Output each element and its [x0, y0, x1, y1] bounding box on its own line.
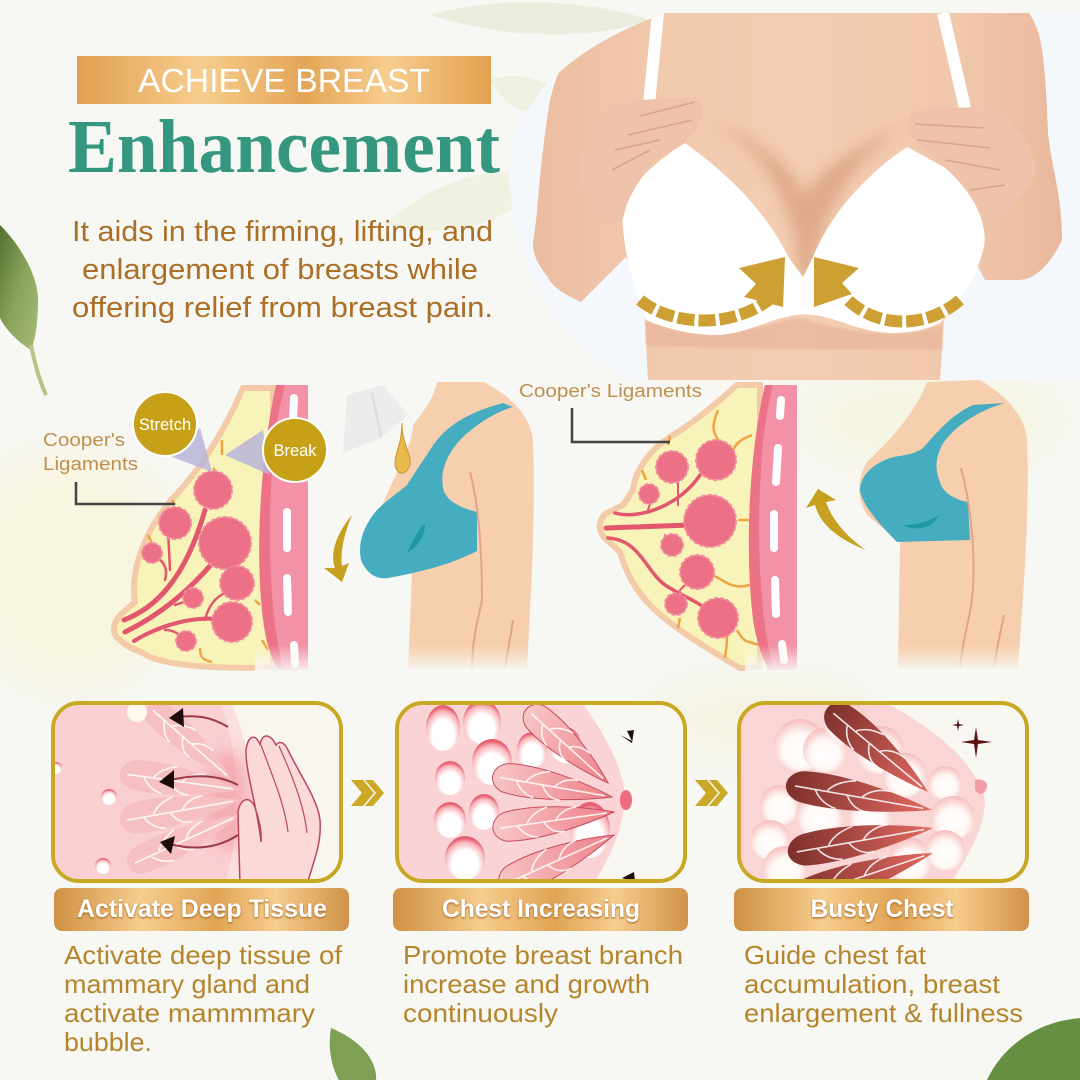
icon: chevrons two	[695, 780, 728, 806]
diagram: after anatomy	[600, 385, 797, 670]
massage arrows	[166, 716, 238, 848]
caption button: chest increasing: Chest Increasing	[442, 895, 640, 923]
panel: busty chest	[737, 701, 1029, 883]
caption button: busty chest: Busty Chest	[810, 895, 954, 923]
ligaments	[642, 410, 758, 658]
title: Enhancement	[68, 105, 500, 189]
intro text: It aids in the firming, lifting, and	[72, 216, 493, 248]
bra	[622, 143, 985, 335]
leaf: bottom centre	[330, 1028, 376, 1080]
caption button: busty chest	[734, 888, 1029, 931]
intro text: offering relief from breast pain.	[72, 292, 493, 324]
ducts	[124, 510, 205, 620]
text: activate deep tissue description: activate mammmary	[64, 998, 315, 1028]
text: chest increasing description: continuously	[403, 998, 558, 1028]
text: activate deep tissue description: bubble.	[64, 1027, 152, 1057]
under-band shading	[646, 318, 942, 350]
hand left	[622, 97, 702, 221]
leaf: left edge	[0, 225, 46, 395]
arrow: sagging down	[324, 515, 352, 582]
ligaments	[148, 440, 268, 662]
chest wall	[749, 385, 797, 670]
soft cleavage shading	[731, 129, 889, 276]
title banner: ACHIEVE BREAST	[138, 62, 430, 99]
intro text	[72, 216, 493, 324]
gold arrows	[739, 257, 785, 307]
callout: Stretch: Stretch	[139, 416, 191, 434]
arrow: lifting up	[806, 489, 866, 550]
icon: chevrons one	[351, 780, 384, 806]
figure: sagging profile	[360, 382, 534, 668]
callout: Break	[225, 418, 327, 482]
icon: cotton pad with oil drop	[343, 385, 410, 473]
straps	[649, 13, 658, 104]
hand right	[944, 108, 1035, 204]
text: activate deep tissue description	[64, 940, 343, 1057]
title banner	[77, 56, 491, 104]
text: busty chest description: enlargement & fullness	[744, 998, 1023, 1028]
text: chest increasing description: increase and growth	[403, 969, 650, 999]
gold compression arc	[640, 299, 770, 321]
caption button: chest increasing	[393, 888, 688, 931]
torso	[533, 13, 1062, 380]
text: busty chest description	[744, 940, 1023, 1028]
text: activate deep tissue description: Activate deep tissue of	[64, 940, 343, 970]
label: Cooper's Ligaments right: Cooper's Ligaments	[519, 381, 702, 401]
text: activate deep tissue description: mammary gland and	[64, 969, 310, 999]
label: Cooper's Ligaments left: Cooper's	[43, 430, 125, 450]
lobules	[194, 471, 232, 509]
callout: Stretch	[133, 392, 212, 472]
text: busty chest description: accumulation, breast	[744, 969, 1001, 999]
diagram: before anatomy	[114, 385, 308, 670]
text: chest increasing description	[403, 940, 683, 1028]
label: Cooper's Ligaments left: Ligaments	[43, 454, 138, 474]
chest wall	[259, 385, 308, 670]
leaf: bottom right	[986, 1018, 1080, 1080]
text: chest increasing description: Promote breast branch	[403, 940, 683, 970]
panel: activate deep tissue	[50, 695, 341, 885]
callout: Break: Break	[273, 442, 317, 460]
panel: chest increasing	[395, 697, 685, 901]
hand	[238, 736, 320, 885]
caption button: activate deep tissue: Activate Deep Tissue	[77, 895, 327, 923]
lobules	[656, 451, 688, 483]
text: busty chest description: Guide chest fat	[744, 940, 927, 970]
ducts	[615, 475, 700, 515]
label: Cooper's Ligaments left	[43, 430, 175, 504]
photo panel	[500, 10, 1080, 385]
caption button: activate deep tissue	[54, 888, 349, 931]
intro text: enlargement of breasts while	[82, 254, 478, 286]
diagram bottom fades	[255, 645, 1027, 673]
label: Cooper's Ligaments right	[519, 381, 702, 442]
figure: lifted profile	[859, 380, 1028, 668]
